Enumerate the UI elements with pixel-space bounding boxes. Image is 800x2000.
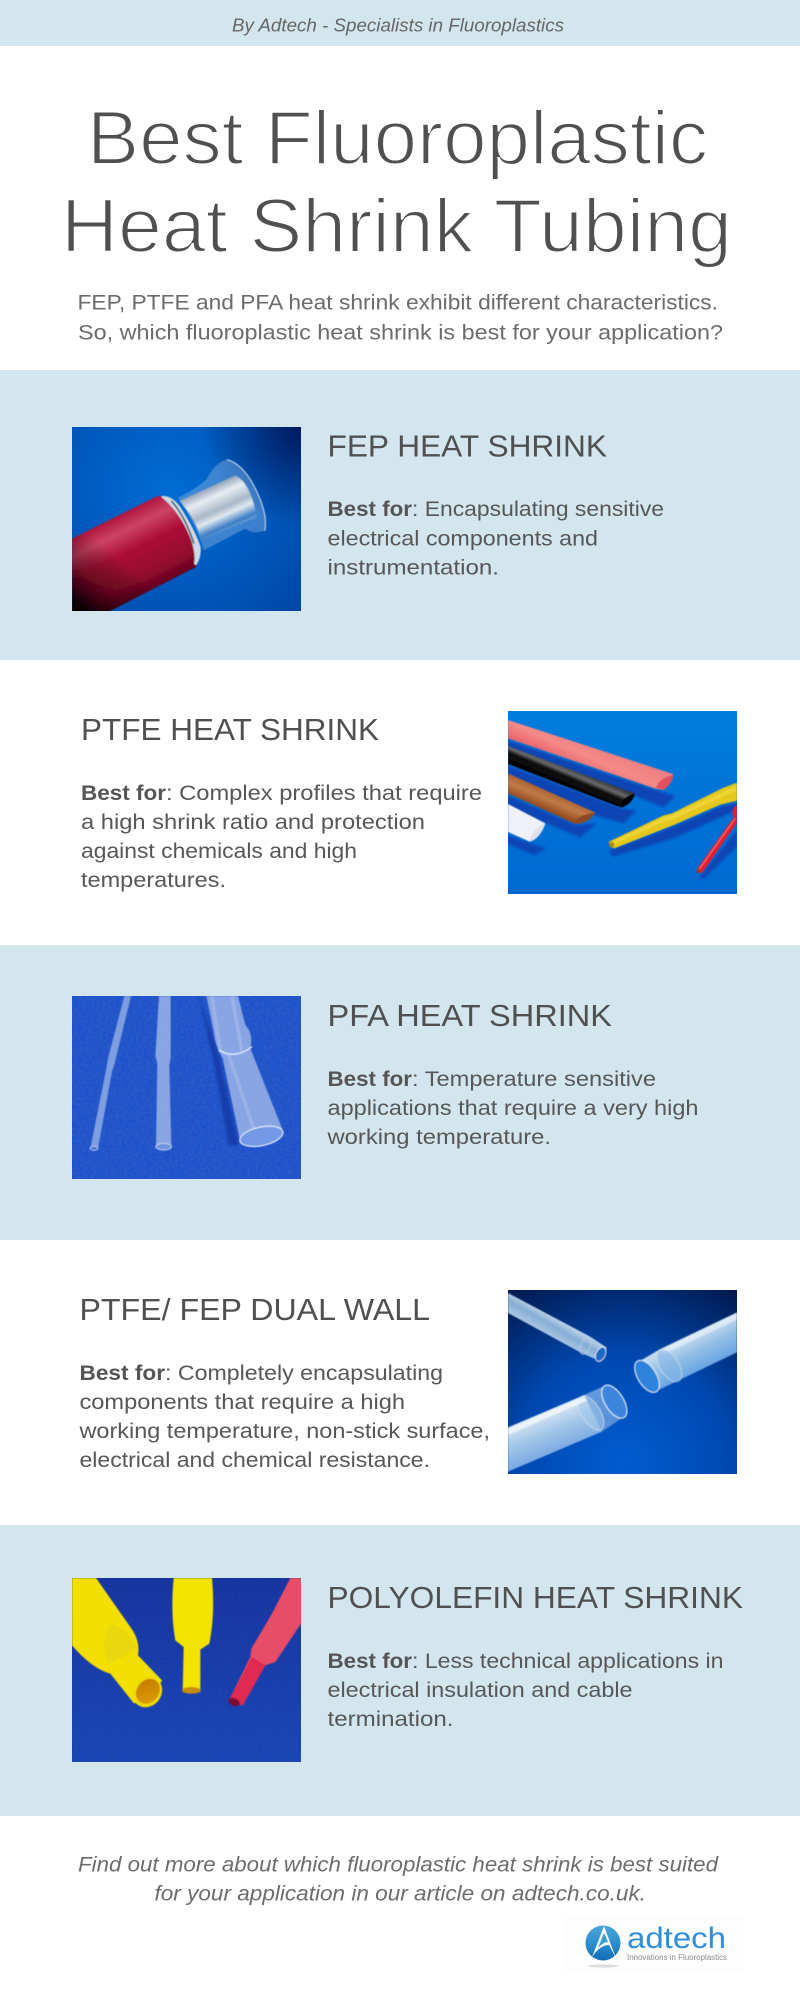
- photo: dual wall tubes: [508, 1290, 737, 1474]
- title: [61, 96, 732, 269]
- intro text: [78, 292, 723, 344]
- description: applications that require a very high: [328, 1096, 698, 1120]
- heading: POLYOLEFIN HEAT SHRINK: [328, 1580, 743, 1615]
- photo: clear PFA tubes: [72, 996, 301, 1179]
- title: Heat Shrink Tubing: [61, 184, 732, 269]
- description: [326, 1067, 698, 1149]
- description: : Less technical applications in: [412, 1649, 724, 1673]
- description: : Temperature sensitive: [412, 1067, 656, 1091]
- description: [81, 781, 482, 892]
- description: : Complex profiles that require: [166, 781, 482, 805]
- description: [78, 1361, 490, 1472]
- description: Best for: [81, 781, 167, 805]
- title: Best Fluoroplastic: [87, 96, 708, 181]
- description: Best for: [80, 1361, 166, 1385]
- heading: PTFE/ FEP DUAL WALL: [80, 1292, 430, 1327]
- description: electrical components and: [328, 526, 598, 550]
- description: [328, 497, 664, 580]
- description: temperatures.: [81, 868, 226, 892]
- description: electrical and chemical resistance.: [80, 1448, 430, 1472]
- description: components that require a high: [80, 1390, 405, 1414]
- description: : Encapsulating sensitive: [412, 497, 664, 521]
- description: Best for: [328, 497, 413, 521]
- panel: FEP heat shrink: [0, 370, 800, 660]
- panel: PTFE heat shrink: [81, 710, 737, 895]
- description: [328, 1649, 724, 1731]
- photo: coloured PTFE tubes: [508, 711, 737, 894]
- banner byline: By Adtech - Specialists in Fluoroplastics: [232, 16, 564, 36]
- description: : Completely encapsulating: [165, 1361, 443, 1385]
- footer call to action: Find out more about which fluoroplastic heat shrink is best suited: [78, 1854, 719, 1876]
- panel: PFA heat shrink: [0, 945, 800, 1240]
- panel: Polyolefin heat shrink: [0, 1525, 800, 1816]
- logo: adtech: [563, 1917, 745, 1973]
- panel: PTFE/FEP dual wall: [78, 1289, 737, 1474]
- photo: FEP heat shrink on metal cylinder: [72, 427, 301, 611]
- intro text: So, which fluoroplastic heat shrink is best for your application?: [78, 322, 723, 344]
- footer call to action: for your application in our article on adtech.co.uk.: [154, 1882, 646, 1906]
- logo sphere mark: [586, 1926, 620, 1960]
- heading: PTFE HEAT SHRINK: [81, 712, 379, 747]
- heading: FEP HEAT SHRINK: [328, 428, 607, 464]
- description: Best for: [328, 1067, 413, 1091]
- description: Best for: [328, 1649, 413, 1673]
- description: instrumentation.: [328, 556, 499, 580]
- top banner: [0, 0, 800, 46]
- heading: PFA HEAT SHRINK: [328, 998, 612, 1033]
- footer call to action: [78, 1854, 719, 1906]
- intro text: FEP, PTFE and PFA heat shrink exhibit different characteristics.: [78, 292, 718, 314]
- photo: polyolefin tubes: [72, 1578, 301, 1762]
- logo tagline: Innovations in Fluoroplastics: [627, 1953, 727, 1962]
- description: working temperature, non-stick surface,: [78, 1419, 490, 1443]
- description: working temperature.: [326, 1125, 551, 1149]
- description: electrical insulation and cable: [328, 1678, 632, 1702]
- description: a high shrink ratio and protection: [81, 810, 425, 834]
- description: against chemicals and high: [81, 839, 357, 863]
- logo wordmark: adtech: [627, 1922, 726, 1955]
- description: termination.: [328, 1707, 454, 1731]
